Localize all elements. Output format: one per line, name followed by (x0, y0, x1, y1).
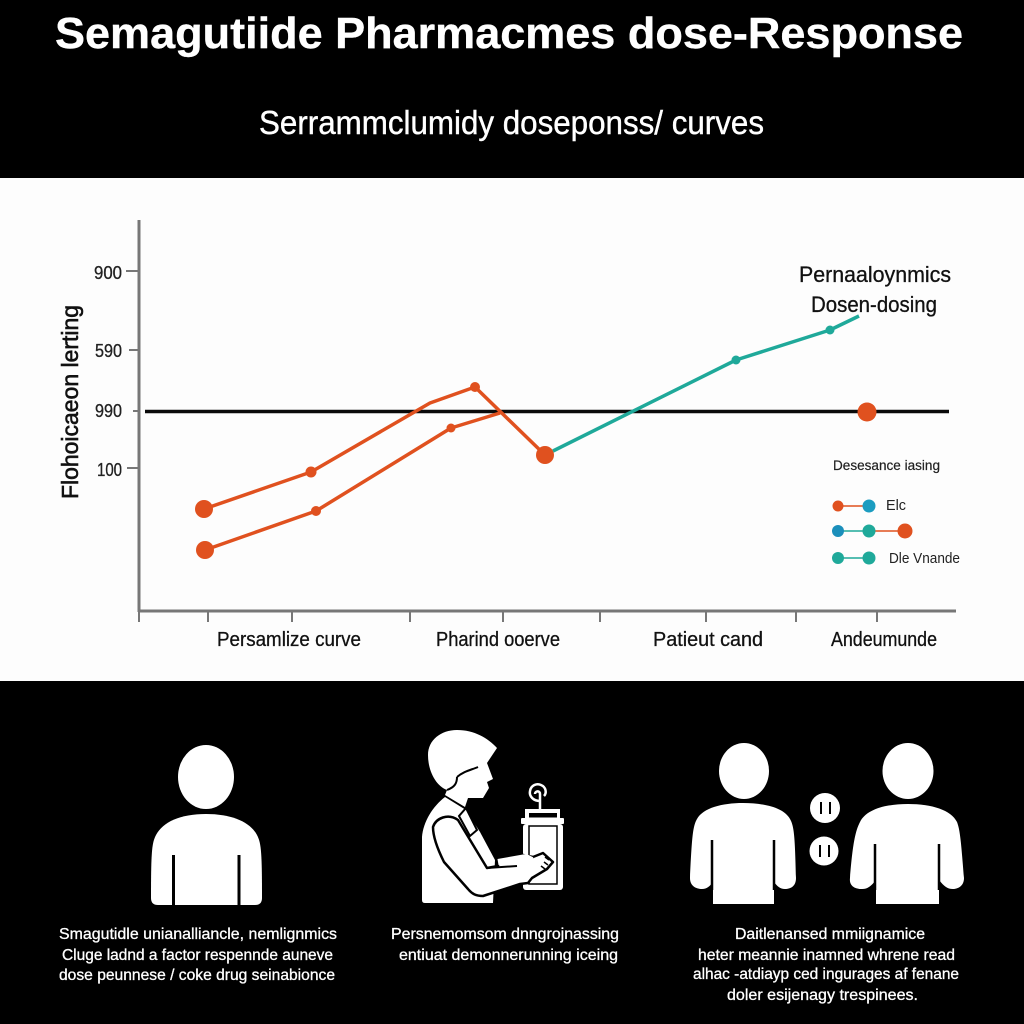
panel: chart (0, 178, 1024, 681)
title: Semagutiide Pharmacmes dose-Response (55, 9, 963, 58)
reference line (145, 410, 949, 413)
text: column 3: doler esijenagy trespinees. (727, 987, 918, 1004)
x axis: Persamlize curve (217, 629, 361, 651)
text: column 3: alhac -atdiayp ced ingurages af fenane (693, 966, 959, 983)
text: column 1: Smagutidle unianalliancle, nemlignmics (59, 926, 337, 943)
y axis label: Flohoicaeon lerting (57, 305, 83, 499)
marker: orange dot on line (858, 402, 876, 422)
bottle (521, 784, 564, 890)
text: column 1: Cluge ladnd a factor respennde auneve (62, 947, 333, 964)
text: column 1 (59, 926, 337, 984)
text: column 2: Persnemomsom dnngrojnassing (391, 926, 619, 943)
subtitle: Serrammclumidy doseponss/ curves (259, 104, 764, 141)
legend: Desesance iasing (833, 458, 940, 473)
text: column 3: heter meannie inamned whrene read (698, 947, 955, 964)
curve: teal (553, 316, 859, 451)
y axis (94, 220, 139, 612)
icon: two people with pills (690, 743, 964, 904)
pill: lower (810, 836, 838, 866)
curve annotation (799, 262, 951, 317)
curve annotation: Pernaaloynmics (799, 262, 951, 287)
arm and hand (433, 817, 553, 896)
x axis (139, 611, 956, 651)
legend: Elc (886, 497, 906, 514)
icon: pharmacist with bottle (422, 730, 564, 903)
text: column 3: Daitlenansed mmiignamice (735, 926, 925, 943)
y axis: 990 (95, 401, 122, 421)
x axis: Andeumunde (831, 629, 937, 651)
legend: Dle Vnande (889, 550, 960, 567)
icon: person (151, 745, 262, 905)
y axis: 590 (95, 341, 122, 361)
legend (832, 458, 960, 567)
torso (422, 797, 495, 903)
text: column 1: dose peunnese / coke drug seinabionce (59, 967, 335, 984)
curve: upper orange (195, 382, 554, 518)
curve annotation: Dosen-dosing (811, 292, 937, 317)
left person (690, 743, 796, 904)
curve: lower orange (196, 413, 500, 559)
right person (850, 743, 964, 904)
x axis: Patieut cand (653, 629, 763, 651)
head and cap (428, 730, 497, 807)
x axis: Pharind ooerve (436, 629, 560, 651)
y axis: 900 (94, 263, 122, 283)
text: column 2 (391, 926, 619, 964)
collar (459, 808, 477, 836)
y axis: 100 (97, 460, 122, 480)
text: column 2: entiuat demonnerunning iceing (399, 947, 618, 964)
text: column 3 (693, 926, 959, 1004)
pill: upper (810, 793, 840, 823)
